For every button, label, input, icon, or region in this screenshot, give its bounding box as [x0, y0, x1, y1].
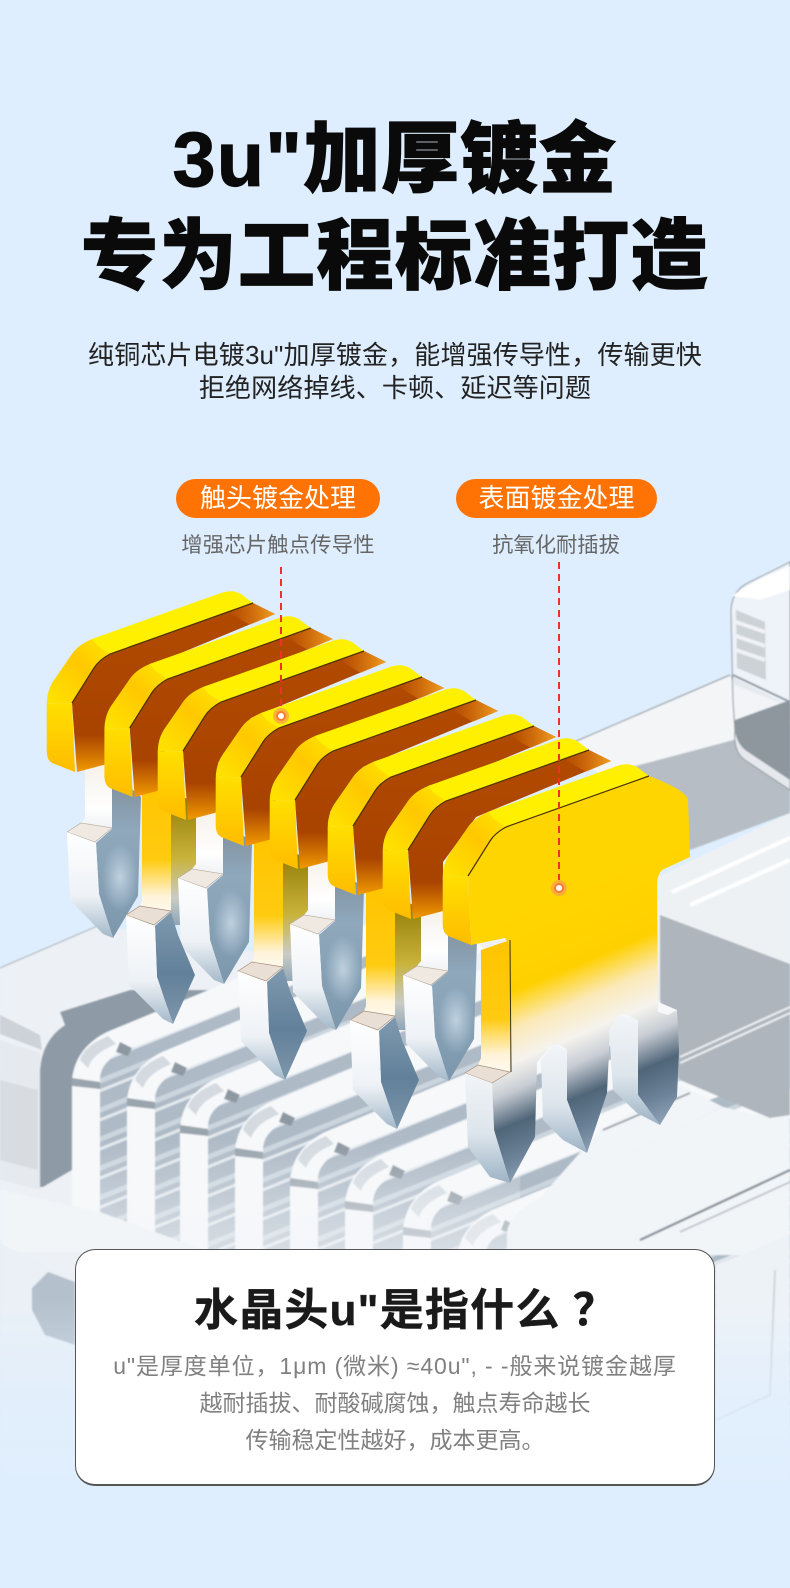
plastic housing [0, 675, 790, 1510]
front contact blade [443, 764, 690, 1183]
gold plated contact bands [47, 591, 611, 919]
label pill: contact plating [176, 479, 380, 518]
housing latch block [731, 562, 790, 790]
card body: 传输稳定性越好，成本更高。 [246, 1427, 544, 1453]
info card [75, 1249, 715, 1486]
description: 拒绝网络掉线、卡顿、延迟等问题 [199, 373, 591, 403]
card heading: 水晶头u"是指什么 ？ [194, 1286, 618, 1335]
caption: contact plating: 增强芯片触点传导性 [181, 533, 375, 557]
card body [113, 1353, 677, 1453]
card body: 越耐插拔、耐酸碱腐蚀，触点寿命越长 [200, 1390, 590, 1416]
description [88, 340, 702, 403]
even contact pins [126, 780, 419, 1129]
staggered back stems of contacts [171, 790, 422, 1030]
caption: surface plating: 抗氧化耐插拔 [492, 533, 620, 557]
callout pointer: surface plating [551, 562, 567, 896]
title line 1: 3u"加厚镀金 [173, 117, 617, 203]
callout pointer: contact plating [273, 567, 289, 724]
label pill: surface plating [456, 479, 657, 518]
bottom fade to background [0, 1300, 790, 1512]
description: 纯铜芯片电镀3u"加厚镀金，能增强传导性，传输更快 [88, 340, 702, 370]
label pill: contact plating: 触头镀金处理 [200, 483, 356, 513]
label pill: surface plating: 表面镀金处理 [478, 483, 634, 513]
title line 2: 专为工程标准打造 [81, 214, 709, 300]
card body: u"是厚度单位，1μm (微米) ≈40u", - -般来说镀金越厚 [113, 1353, 677, 1379]
odd contact pins [67, 757, 477, 1081]
